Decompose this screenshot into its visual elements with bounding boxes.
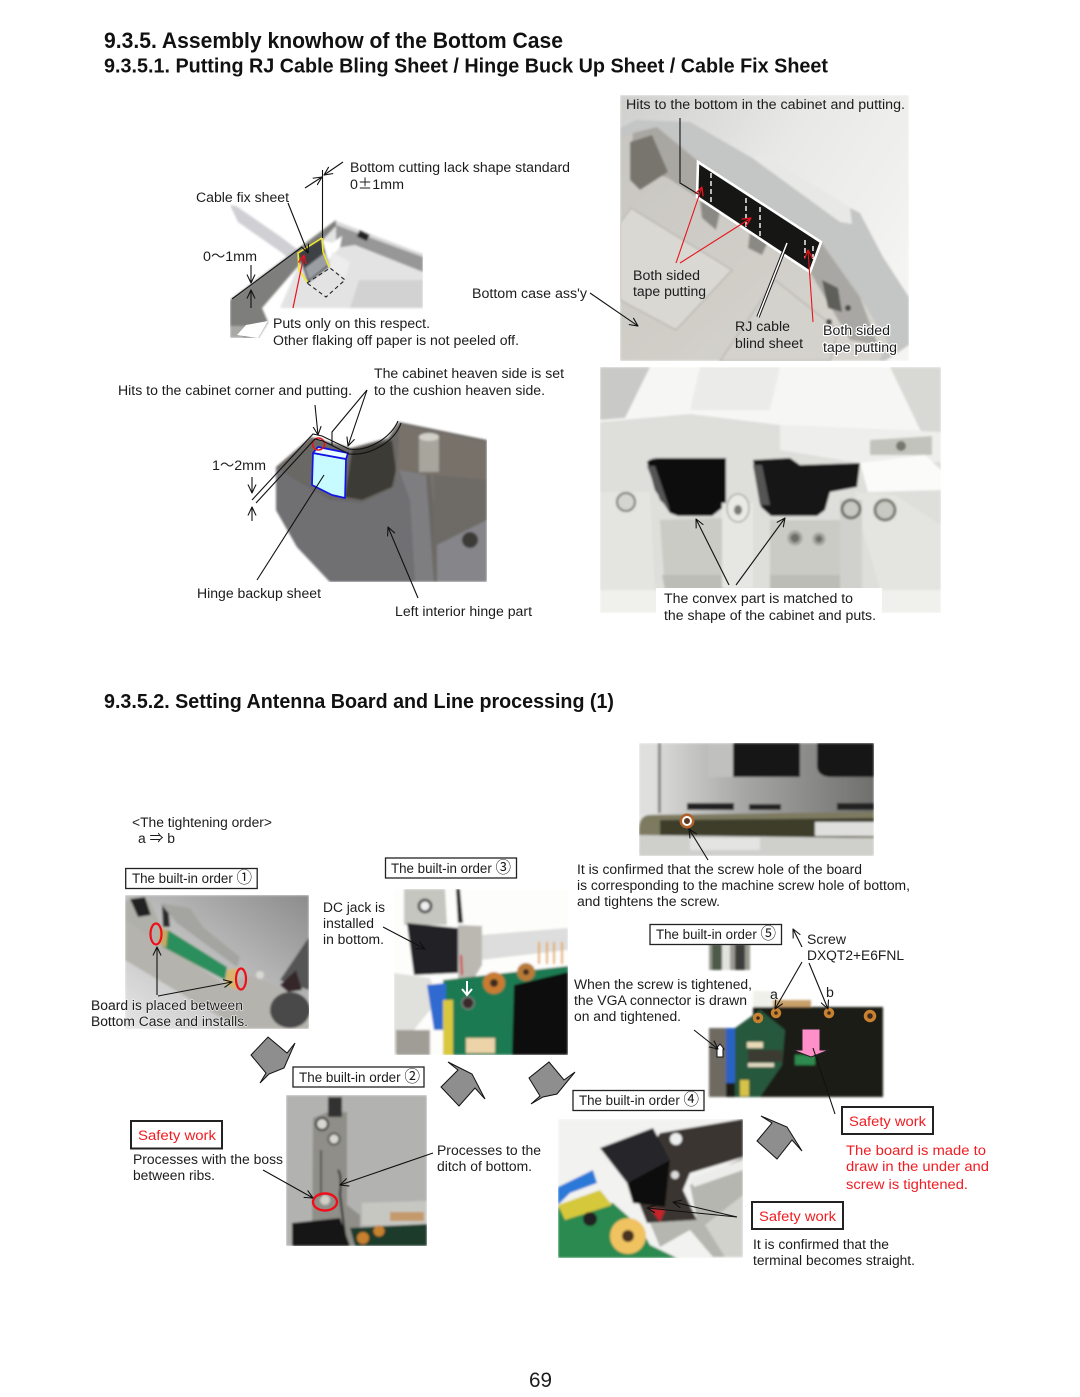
label: both sided tape, right <box>823 323 897 356</box>
note: puts only: Puts only on this respect. <box>273 316 430 332</box>
panel: built-in order 2 <box>263 1067 541 1246</box>
caption: DC jack: in bottom. <box>323 932 384 948</box>
label: both sided tape, right: tape putting <box>823 340 897 356</box>
notch in lower wing <box>237 321 268 338</box>
caption: ditch: Processes to the <box>437 1143 541 1159</box>
safety box <box>131 1121 222 1148</box>
arrow: step 1 to 2 <box>251 1037 295 1083</box>
red ellipse marker <box>313 1194 337 1210</box>
photo: cabinet bottom <box>620 95 909 361</box>
order label 1: The built-in order ① <box>132 868 252 887</box>
caption: DC jack: DC jack is <box>323 900 385 916</box>
arrows <box>263 1153 433 1198</box>
label: both sided tape, left: Both sided <box>633 268 700 284</box>
panel: screw hole confirmation <box>577 743 910 910</box>
text: tightening order: a ⇒ b <box>138 831 175 847</box>
caption: ditch: ditch of bottom. <box>437 1159 532 1175</box>
heading: section 9.3.5.2: 9.3.5.2. Setting Antenna Board and Line processing (1) <box>104 691 614 713</box>
safety box <box>842 1107 933 1134</box>
panel: built-in order 1 <box>91 868 310 1030</box>
panel: built-in order 5 <box>574 924 904 1114</box>
panel: RJ cable blind sheet photo <box>620 95 909 361</box>
arrows to terminals <box>647 1202 737 1217</box>
title: section 9.3.5: 9.3.5. Assembly knowhow of the Bottom Case <box>104 28 563 53</box>
arrows to boss positions <box>157 947 232 996</box>
caption: convex part: The convex part is matched to <box>664 591 853 607</box>
note: boss between ribs <box>133 1152 283 1184</box>
order label 2: The built-in order ② <box>299 1067 420 1086</box>
safety box: Safety work <box>759 1209 837 1225</box>
caption: screw hole: It is confirmed that the screw hole of the board <box>577 862 862 878</box>
label: screw part number <box>807 932 904 964</box>
panel: built-in order 3 <box>323 858 568 1055</box>
caption: VGA connector <box>574 977 752 1025</box>
outline: dashed placement area <box>307 268 345 297</box>
safety box: Safety work <box>849 1114 927 1130</box>
label: hits to the bottom: Hits to the bottom in the cabinet and putting. <box>626 97 905 113</box>
caption: VGA connector: on and tightened. <box>574 1009 681 1025</box>
photo: cabinet with two openings <box>600 367 941 613</box>
panel: safety work upper right <box>842 1107 989 1193</box>
label: bottom case assembly with arrow: Bottom case ass'y <box>472 286 588 302</box>
caption: board placement: Bottom Case and installs. <box>91 1014 248 1030</box>
caption: convex part: the shape of the cabinet and puts. <box>664 608 876 624</box>
caption: ditch <box>437 1143 541 1175</box>
label: RJ cable blind sheet: blind sheet <box>735 336 803 352</box>
label: RJ cable blind sheet <box>735 319 803 352</box>
note: boss between ribs: between ribs. <box>133 1168 215 1184</box>
label: a: a <box>770 987 778 1003</box>
label: cable fix sheet: Cable fix sheet <box>196 190 289 206</box>
red note: board draw <box>846 1143 989 1193</box>
note: terminal straight: terminal becomes straight. <box>753 1253 915 1269</box>
red note: board draw: The board is made to <box>846 1143 986 1159</box>
label: cutting standard: Bottom cutting lack shape standard <box>350 160 570 176</box>
label: RJ cable blind sheet: RJ cable <box>735 319 790 335</box>
caption: board placement: Board is placed between <box>91 998 243 1014</box>
panel: cable fix sheet diagram <box>196 160 570 349</box>
backup sheet in blue <box>312 447 348 498</box>
label: hinge backup sheet: Hinge backup sheet <box>197 586 321 602</box>
panel: convex part photo <box>600 367 941 624</box>
label: heaven side: The cabinet heaven side is set <box>374 366 564 382</box>
label: screw part number: DXQT2+E6FNL <box>807 948 904 964</box>
panel: built-in order 4 <box>558 1090 743 1258</box>
caption: VGA connector: When the screw is tightened, <box>574 977 752 993</box>
leader arrows <box>694 929 835 1114</box>
caption: screw hole: and tightens the screw. <box>577 894 720 910</box>
dashed tape marks <box>711 173 813 262</box>
text: tightening order <box>132 815 272 847</box>
photo: board with screws <box>709 991 883 1097</box>
label: both sided tape, right: Both sided <box>823 323 890 339</box>
caption: screw hole <box>577 862 910 910</box>
caption: DC jack: installed <box>323 916 374 932</box>
heading: section 9.3.5.1: 9.3.5.1. Putting RJ Cable Bling Sheet / Hinge Buck Up Sheet / Cable Fix Sheet <box>104 56 828 78</box>
highlight: yellow sheet outline <box>298 238 329 283</box>
label: bottom case assembly with arrow <box>472 286 638 326</box>
page number: 69 <box>529 1369 552 1392</box>
arrow: step 3 to 4/5 <box>529 1062 575 1104</box>
RJ cable blind sheet <box>697 162 821 272</box>
photo: boss between ribs <box>286 1095 427 1246</box>
order label 4: The built-in order ④ <box>579 1090 699 1109</box>
order label 3: The built-in order ③ <box>391 858 511 877</box>
white caption backing <box>656 588 882 613</box>
white arrow on board <box>462 981 472 995</box>
label: tolerance: 0±1mm <box>350 174 404 194</box>
text: tightening order: <The tightening order> <box>132 815 272 831</box>
panel: safety work left <box>131 1121 283 1184</box>
arrow: step 4 to 5 <box>757 1116 802 1159</box>
photo strip under label <box>709 944 750 970</box>
label: heaven side: to the cushion heaven side. <box>374 383 545 399</box>
photo: DC jack on board <box>394 889 568 1055</box>
panel: hinge backup sheet <box>118 366 564 620</box>
note: flaking paper: Other flaking off paper is not peeled off. <box>273 333 519 349</box>
caption: board placement <box>91 998 248 1030</box>
screw hole marker <box>680 814 694 828</box>
photo: board placed in bottom case <box>125 895 310 1029</box>
photo: case corner with cable fix sheet <box>230 205 423 338</box>
label: 1 to 2 mm: 1～2mm <box>212 458 266 474</box>
photo: terminal detail <box>558 1119 743 1258</box>
red note: board draw: draw in the under and <box>846 1159 989 1175</box>
label: heaven side <box>374 366 564 399</box>
caption: screw hole: is corresponding to the machine screw hole of bottom, <box>577 878 910 894</box>
note: terminal straight: It is confirmed that the <box>753 1237 889 1253</box>
photo: metal bottom and screw hole <box>639 743 874 856</box>
arrows to convex parts <box>696 518 785 585</box>
caption: convex part <box>664 591 876 624</box>
caption: DC jack <box>323 900 385 948</box>
photo: left interior hinge <box>276 422 487 582</box>
arrow to screw hole <box>689 829 708 860</box>
label: screw part number: Screw <box>807 932 847 948</box>
label: both sided tape, left <box>633 268 706 300</box>
label: b: b <box>826 985 834 1001</box>
icon: white up arrow <box>716 1044 724 1057</box>
label: both sided tape, left: tape putting <box>633 284 706 300</box>
arrow: step 2 to 3 <box>441 1062 485 1106</box>
red note: board draw: screw is tightened. <box>846 1177 968 1193</box>
safety box: Safety work <box>138 1128 217 1144</box>
label: hits to the corner: Hits to the cabinet corner and putting. <box>118 383 352 399</box>
label: left interior hinge part: Left interior hinge part <box>395 604 532 620</box>
screw rings <box>754 1010 874 1022</box>
leader lines and dimension arrows <box>232 162 343 308</box>
leader lines <box>676 118 813 322</box>
label: gap: 0～1mm <box>203 249 257 265</box>
note: boss between ribs: Processes with the boss <box>133 1152 283 1168</box>
red ellipse markers <box>150 924 246 990</box>
note: terminal straight <box>753 1237 915 1269</box>
red circle marker <box>312 438 324 450</box>
icon: pink down arrow <box>793 1029 829 1057</box>
cabinet outline and leaders <box>252 390 418 598</box>
caption: VGA connector: the VGA connector is drawn <box>574 993 747 1009</box>
arrow to DC jack <box>383 927 425 949</box>
panel: safety work lower right <box>752 1202 915 1269</box>
order label 5: The built-in order ⑤ <box>656 924 776 943</box>
safety box <box>752 1202 843 1229</box>
